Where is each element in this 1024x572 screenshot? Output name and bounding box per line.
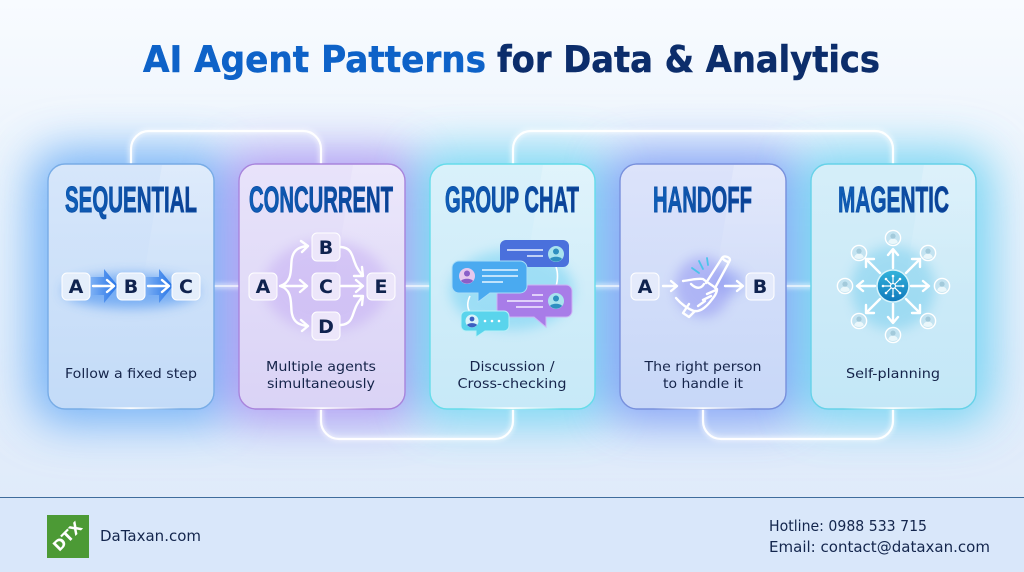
panel: concurrent (239, 164, 405, 409)
diagram: fan out A to B C D to E: B (319, 237, 333, 259)
title: AI Agent Patterns (143, 38, 486, 81)
panel: magentic (811, 164, 976, 409)
description: concurrent: simultaneously (267, 376, 375, 392)
diagram: A to B to C: C (179, 276, 193, 298)
description: handoff: to handle it (663, 376, 743, 392)
panel: sequential (48, 164, 214, 409)
heading: sequential: SEQUENTIAL (65, 179, 197, 220)
footer contact details (769, 517, 990, 556)
title (143, 38, 880, 81)
footer contact details: Hotline: 0988 533 715 (769, 517, 927, 535)
diagram: A to B to C (62, 269, 200, 308)
chat bubble: small cyan (461, 311, 509, 337)
description: handoff (643, 359, 762, 392)
icon: chat bubbles (450, 240, 574, 337)
icon: spark lines (692, 258, 708, 273)
panel: group chat (430, 164, 595, 409)
diagram: fan out A to B C D to E: D (318, 316, 334, 338)
footer contact details: Email: contact@dataxan.com (769, 538, 990, 556)
description: group chat (458, 359, 566, 392)
diagram: fan out A to B C D to E: A (256, 276, 271, 298)
background glows (30, 152, 990, 421)
heading: handoff: HANDOFF (653, 179, 752, 220)
diagram: central hub with agents (837, 230, 950, 343)
heading: group chat: GROUP CHAT (445, 179, 579, 220)
description: group chat: Discussion / (470, 359, 555, 375)
diagram: A to B to C: A (69, 276, 84, 298)
description: sequential: Follow a fixed step (65, 366, 197, 382)
description: group chat: Cross-checking (458, 376, 566, 392)
description: concurrent: Multiple agents (266, 359, 376, 375)
description: handoff: The right person (643, 359, 762, 375)
diagram: A hands baton to B: B (753, 276, 767, 298)
chat bubble: purple (497, 285, 572, 327)
connectors between cards (131, 131, 893, 439)
chat bubble: back indigo (500, 240, 569, 275)
footer band (0, 497, 1024, 572)
description: magentic: Self-planning (846, 366, 940, 382)
heading: concurrent: CONCURRENT (249, 179, 393, 220)
diagram: fan out A to B C D to E (249, 233, 395, 340)
diagram: A hands baton to B (631, 257, 774, 317)
footer logo: DTX (49, 518, 86, 555)
diagram: A to B to C: B (124, 276, 138, 298)
title: for Data & Analytics (497, 38, 880, 81)
description: concurrent (266, 359, 376, 392)
diagram: fan out A to B C D to E: C (319, 276, 333, 298)
panel: handoff (620, 164, 786, 409)
diagram: A hands baton to B: A (638, 276, 653, 298)
chat bubble: blue (452, 261, 527, 302)
diagram: fan out A to B C D to E: E (375, 276, 387, 298)
footer brand name: DaTaxan.com (100, 527, 201, 545)
icon: hand with baton (676, 257, 730, 317)
